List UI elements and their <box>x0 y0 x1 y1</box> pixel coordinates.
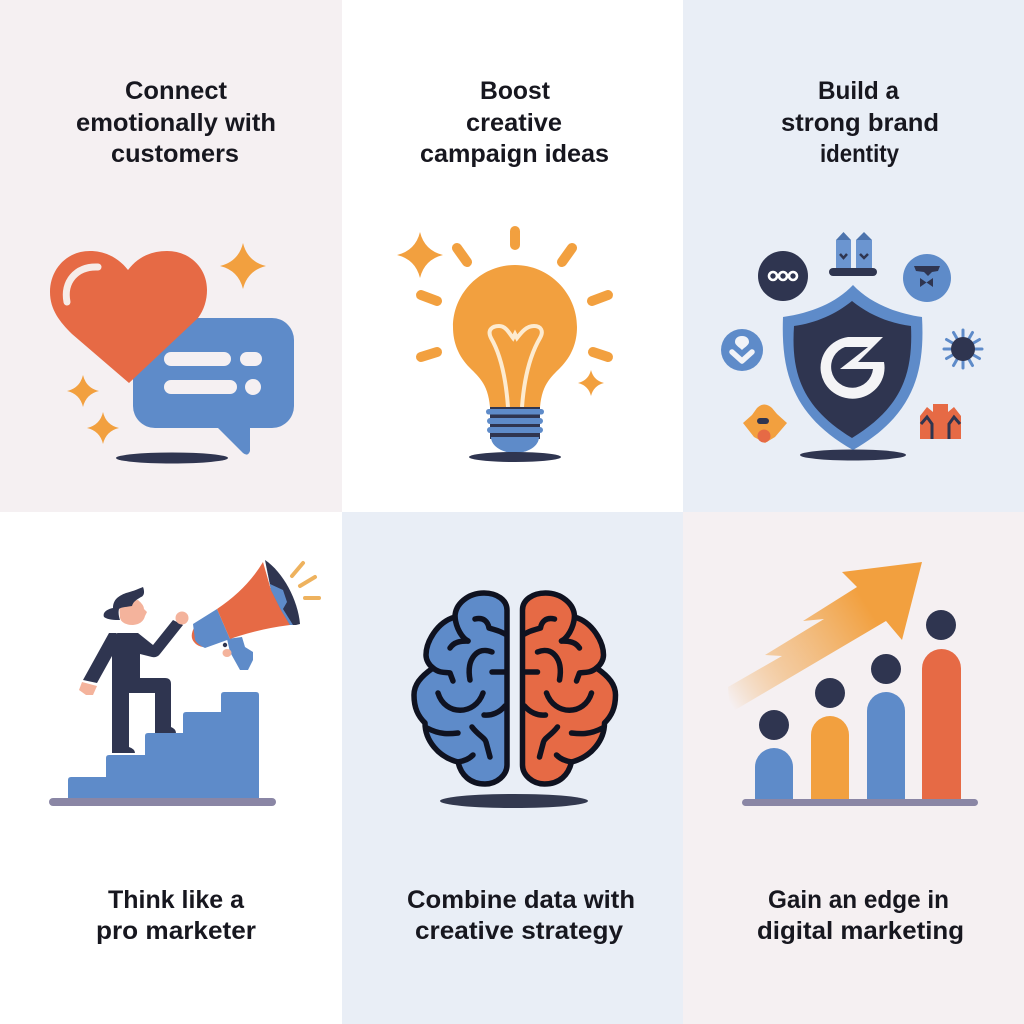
icon: sun <box>944 330 982 368</box>
icon: shield <box>783 285 922 450</box>
chart: people bars <box>742 610 978 806</box>
icon: chat bubble <box>133 318 294 455</box>
shadow <box>116 452 228 464</box>
heading: data and creative: creative strategy <box>415 917 623 945</box>
icon: sparkles <box>67 243 266 444</box>
right hemisphere <box>522 593 616 784</box>
icon: sparkles <box>397 232 604 396</box>
panel: pro marketer <box>0 512 342 1024</box>
icon: blue circle with chevron <box>721 329 763 371</box>
panel: boost creative ideas <box>342 0 683 512</box>
heading: data and creative <box>407 886 635 945</box>
icon: blue circle with bow <box>903 254 951 302</box>
heading: pro marketer: pro marketer <box>96 917 256 945</box>
left hemisphere <box>414 593 507 784</box>
shadow <box>440 794 588 808</box>
heading: connect emotionally: customers <box>111 140 239 168</box>
illustration: stairs <box>49 692 276 806</box>
icon: dark circle with dots <box>758 251 808 301</box>
heading: connect emotionally: emotionally with <box>76 109 276 137</box>
icon: light bulb <box>453 265 577 453</box>
illustration: rising arrow <box>728 562 922 713</box>
panel: connect emotionally <box>0 0 342 512</box>
illustration: brain <box>414 593 616 784</box>
icon: gift house <box>920 404 961 439</box>
heading: strong brand identity: identity <box>820 140 899 168</box>
heading: data and creative: Combine data with <box>407 886 635 914</box>
icon: light rays <box>421 231 608 357</box>
heading: digital edge: Gain an edge in <box>768 886 949 914</box>
heading: digital edge <box>757 886 964 945</box>
heading: strong brand identity <box>781 77 939 168</box>
shadow <box>800 450 906 460</box>
panel: data and creative <box>342 512 683 1024</box>
heading: boost creative ideas: creative <box>466 109 562 137</box>
heading: digital edge: digital marketing <box>757 917 964 945</box>
heading: pro marketer <box>96 886 256 945</box>
panel: digital edge <box>683 512 1024 1024</box>
heading: connect emotionally: Connect <box>125 77 228 105</box>
heading: connect emotionally <box>76 77 276 168</box>
heading: pro marketer: Think like a <box>108 886 245 914</box>
heading: strong brand identity: strong brand <box>781 109 939 137</box>
illustration: megaphone <box>192 560 300 670</box>
icon: sound lines <box>292 563 319 598</box>
icon: heart <box>50 251 207 383</box>
heading: boost creative ideas: Boost <box>480 77 551 105</box>
heading: strong brand identity: Build a <box>818 77 900 105</box>
icon: towers <box>829 232 877 276</box>
heading: boost creative ideas: campaign ideas <box>420 140 609 168</box>
illustration: person <box>79 587 188 753</box>
icon: orange mascot <box>743 404 787 443</box>
panel: strong brand identity <box>683 0 1024 512</box>
shadow <box>469 452 561 462</box>
heading: boost creative ideas <box>420 77 609 168</box>
